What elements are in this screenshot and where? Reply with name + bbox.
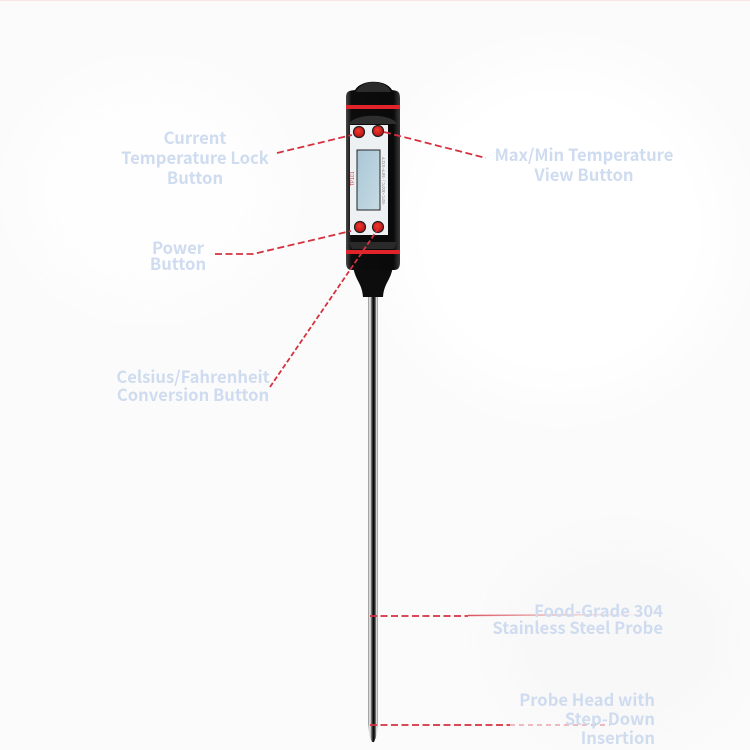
leader: probe head xyxy=(370,724,610,726)
button: unit xyxy=(372,222,384,232)
leader: power button xyxy=(215,231,351,254)
model label: TP101 xyxy=(349,171,356,186)
lower red band xyxy=(346,250,400,254)
button: power xyxy=(354,222,366,232)
leader: unit button xyxy=(270,229,378,387)
label: current temperature lock button: Button xyxy=(167,165,223,189)
display panel xyxy=(350,125,388,235)
label: stainless steel probe: Stainless Steel Probe xyxy=(492,615,663,639)
handle body xyxy=(346,82,400,270)
label: power button: Power xyxy=(152,235,204,259)
range label: -50°C~300°C / -58°F~572°F xyxy=(381,156,387,205)
label: power button: Button xyxy=(150,251,206,275)
LCD screen xyxy=(357,150,380,210)
upper red band xyxy=(346,105,400,109)
dome cap xyxy=(356,82,391,92)
label: max/min temperature view button: View Button xyxy=(533,162,634,186)
label: stainless steel probe: Food-Grade 304 xyxy=(534,598,663,622)
lower recess xyxy=(349,242,397,249)
leader: probe xyxy=(370,614,640,616)
label: max/min temperature view button: Max/Min Temperature xyxy=(495,142,673,166)
label: probe head: Probe Head with xyxy=(519,687,655,711)
button: hold xyxy=(354,126,364,138)
thermometer xyxy=(346,82,400,742)
label: current temperature lock button: Current xyxy=(164,125,226,149)
probe shaft xyxy=(368,295,378,742)
label: celsius/fahrenheit conversion button: Conversion Button xyxy=(117,382,269,406)
handle neck xyxy=(353,264,393,297)
label: probe head: Insertion xyxy=(581,725,655,749)
button: max/min xyxy=(372,126,384,136)
leader: lock button xyxy=(277,135,352,153)
label: celsius/fahrenheit conversion button: Celsius/Fahrenheit xyxy=(116,364,270,388)
label: current temperature lock button: Temperature Lock xyxy=(121,145,269,169)
upper recess xyxy=(349,116,397,124)
label: probe head: Step-Down xyxy=(565,706,655,730)
leader: max/min button xyxy=(384,132,486,158)
